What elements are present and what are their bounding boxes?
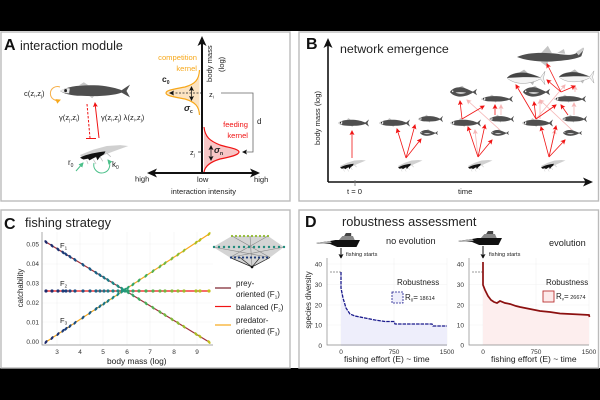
legend: R0 robustness: 18614: [418, 296, 435, 302]
panel letter D: D: [305, 214, 317, 231]
label: zi: z: [209, 90, 213, 99]
y tick labels: 0.05: [26, 242, 39, 248]
legend: R0 robustness: Robustness: [397, 278, 439, 287]
label: r0: 0: [71, 163, 74, 169]
label: sigma n: σ: [214, 145, 220, 155]
label: c0: 0: [167, 80, 170, 86]
label: k0: k: [112, 160, 116, 169]
label: fishing effort right: fishing effort (E) ~ time: [491, 354, 577, 364]
legend: Rv robustness: [543, 278, 588, 302]
label: d: d: [257, 117, 261, 126]
chart: catchability lines: [42, 231, 213, 345]
food web stage 2: [379, 115, 443, 172]
y tick labels: 0.01: [26, 320, 39, 326]
label: gamma lambda right: j: [117, 118, 119, 122]
panel: C fishing strategy: [1, 210, 290, 368]
x tick labels: 3: [55, 349, 59, 356]
legend: ): [277, 327, 280, 336]
top letterbox bar: [0, 0, 600, 31]
label: gamma left: ): [77, 113, 80, 122]
icon: fishing boat right: [458, 231, 502, 245]
legend: Rv robustness: Robustness: [546, 278, 588, 287]
label: body mass log: body mass (log): [313, 91, 322, 145]
icon: orange self-competition loop: [50, 87, 60, 101]
label: gamma lambda right: i: [111, 118, 112, 122]
x axis: interaction intensity: [149, 172, 258, 174]
label: catchability: catchability: [16, 269, 25, 307]
legend: oriented (F: [236, 327, 275, 336]
chart: diversity with evolution: [469, 258, 590, 345]
label: k0: 0: [116, 165, 119, 171]
legend: prey-: [236, 279, 255, 288]
label: gamma lambda right: ) λ(z: [119, 113, 134, 122]
legend: 2: [278, 308, 281, 312]
label: high left: high: [135, 174, 149, 184]
label: gamma lambda right: ,z: [135, 113, 141, 122]
legend: ): [281, 303, 284, 312]
y ticks left: 40: [315, 262, 322, 268]
x tick labels: 7: [148, 349, 152, 356]
y ticks left: 20: [315, 302, 322, 310]
label: F3: F: [60, 316, 65, 325]
arrow: fishing starts right: [482, 246, 484, 258]
y ticks right: 40: [457, 262, 464, 268]
label: gamma left: ,z: [70, 113, 76, 122]
x tick labels: 6: [125, 349, 129, 356]
y ticks right: 0: [460, 342, 464, 350]
label: zj: j: [193, 152, 195, 158]
label: F2: F: [60, 279, 65, 288]
label: c(zi,zj): j: [40, 94, 42, 98]
label: sigma n: n: [220, 151, 223, 157]
x tick labels: 5: [101, 349, 105, 356]
x ticks right: 1500: [582, 349, 597, 356]
label: F3: 3: [65, 320, 68, 326]
icon: fishing boat left: [316, 233, 360, 247]
label: r0: r: [68, 158, 71, 167]
label: F1: 1: [65, 246, 68, 250]
x tick labels: 9: [195, 349, 199, 356]
label: F2: 2: [65, 284, 68, 288]
label: body mass log: body mass: [205, 45, 214, 82]
y ticks right: 10: [457, 322, 464, 330]
legend: ): [277, 290, 280, 299]
x ticks left: [339, 349, 455, 356]
label: interaction intensity: interaction intensity: [171, 187, 236, 196]
label: no evolution: no evolution: [386, 236, 436, 246]
label: zj: z: [190, 148, 194, 157]
chart: feeding kernel: [204, 127, 239, 172]
tick: t0: [354, 180, 356, 186]
y ticks left: 0: [318, 343, 322, 350]
y axis: body mass: [201, 38, 203, 173]
x ticks left: 750: [389, 349, 400, 356]
inset: network diagram: [213, 235, 285, 268]
panel: B network emergence: [299, 32, 598, 201]
y tick labels: 0.04: [26, 261, 39, 268]
label: competition kernel: competition: [158, 53, 197, 62]
label: low: low: [197, 175, 209, 184]
arrow: green growth: [76, 163, 83, 171]
heading: interaction module: interaction module: [20, 39, 123, 53]
y ticks right: [457, 262, 464, 350]
label: time: time: [458, 187, 472, 196]
label: high right: high: [254, 175, 268, 184]
x ticks right: 750: [531, 349, 542, 356]
y tick labels: 0.00: [26, 339, 39, 346]
label: F1: F: [60, 241, 65, 250]
y tick labels: 0.02: [26, 300, 39, 307]
label: feeding kernel: feeding: [223, 120, 248, 129]
panel letter B: B: [306, 36, 318, 53]
legend: R0 robustness: 0: [411, 298, 414, 302]
y axis: [327, 40, 329, 182]
label: gamma lambda right: γ(z: [101, 113, 111, 122]
heading: fishing strategy: fishing strategy: [25, 215, 112, 230]
label: gamma lambda right: ,z: [112, 113, 118, 122]
chart: competition kernel: [166, 70, 202, 115]
food web stage 4: [507, 46, 594, 171]
label: c(zi,zj): ,z: [35, 89, 41, 98]
food web stage 1: [338, 118, 369, 172]
y ticks left: 30: [315, 282, 322, 289]
legend: R0 robustness: R: [405, 293, 411, 302]
label: gamma left: i: [76, 118, 77, 122]
legend: Rv robustness: v: [562, 296, 565, 302]
icon: green self-loop: [94, 160, 110, 173]
label: zi: i: [213, 94, 214, 100]
label: gamma lambda right: ): [142, 113, 145, 122]
bottom letterbox bar: [0, 368, 600, 400]
x tick labels: 8: [172, 349, 176, 356]
label: fishing starts right: fishing starts: [489, 252, 521, 258]
x tick labels: 4: [78, 349, 82, 356]
legend: 3: [275, 332, 278, 336]
label: c(zi,zj): c(z: [24, 89, 34, 98]
arrow: dashed red inhibition: [86, 104, 96, 138]
x ticks right: 0: [481, 349, 485, 356]
label: c(zi,zj): ): [42, 89, 45, 98]
label: sigma c: σ: [184, 103, 190, 113]
label: t = 0: t = 0: [347, 187, 362, 196]
legend: [215, 279, 284, 336]
x ticks left: 1500: [440, 349, 455, 356]
legend: predator-: [236, 316, 269, 325]
x ticks left: 0: [339, 349, 343, 356]
legend: Rv robustness: 26674: [569, 295, 586, 301]
heading: network emergence: network emergence: [340, 42, 449, 56]
label: gamma left: j: [68, 118, 70, 122]
icon: krill prey: [80, 145, 128, 164]
chart: diversity without evolution: [327, 258, 447, 346]
label: gamma lambda right: i: [134, 118, 135, 122]
arrow: fishing starts left: [340, 248, 342, 258]
legend: R0 robustness: =: [413, 293, 418, 302]
arrow: solid red feeding: [95, 103, 99, 138]
label: c0: c: [162, 74, 167, 84]
label: gamma left: γ(z: [59, 113, 69, 122]
y tick labels: 0.03: [26, 280, 39, 288]
panel letter C: C: [4, 216, 16, 233]
x tick labels: [55, 349, 199, 356]
legend: Rv robustness: =: [564, 292, 569, 301]
panel: A interaction module: [1, 32, 290, 201]
panel: D robustness assessment: [299, 210, 598, 368]
x axis: time: [328, 181, 591, 183]
food web stage 3: [450, 86, 514, 172]
label: sigma c: c: [190, 109, 193, 115]
label: log: (log): [217, 56, 226, 72]
label: evolution: evolution: [549, 238, 586, 248]
connector: distance d: [221, 93, 253, 152]
heading: robustness assessment: robustness assessment: [342, 214, 477, 229]
legend: balanced (F: [236, 303, 278, 312]
legend: R0 robustness: [392, 278, 439, 303]
icon: predator fish: [60, 82, 130, 98]
y ticks left: [315, 262, 322, 350]
label: gamma lambda right: j: [140, 118, 142, 122]
label: fishing starts left: fishing starts: [346, 252, 378, 258]
label: fishing effort left: fishing effort (E) ~ time: [344, 354, 430, 364]
y tick labels: [26, 242, 39, 346]
label: c(zi,zj): i: [34, 94, 35, 98]
y ticks left: 10: [315, 322, 322, 330]
tick: zj: [198, 151, 202, 153]
label: species diversity: species diversity: [304, 271, 313, 329]
legend: oriented (F: [236, 290, 275, 299]
legend: 1: [275, 294, 278, 300]
y ticks right: 30: [457, 282, 464, 289]
label: competition kernel: kernel: [176, 64, 197, 73]
y ticks right: 20: [457, 302, 464, 310]
label: body mass log: body mass (log): [107, 356, 167, 366]
panel letter A: A: [4, 37, 16, 54]
legend: Rv robustness: R: [556, 292, 562, 301]
label: feeding kernel: kernel: [227, 131, 248, 140]
x ticks right: [481, 349, 597, 356]
